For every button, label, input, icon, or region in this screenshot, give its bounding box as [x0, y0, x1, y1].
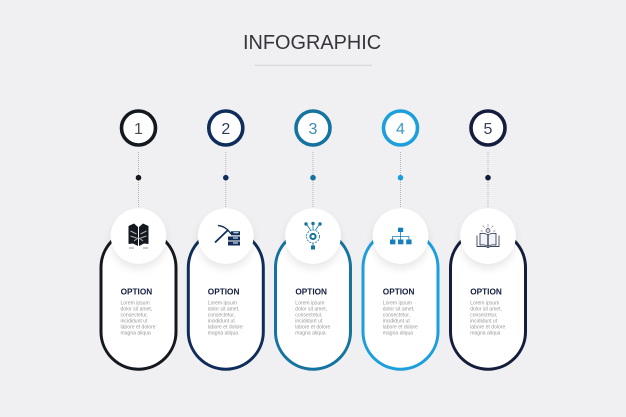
- text: option 5: OPTION: [470, 288, 502, 296]
- text: option 2: labore et dolore: [208, 324, 243, 330]
- number badge 4: [384, 111, 418, 145]
- icon: brain book: [128, 224, 148, 248]
- text: option 3: OPTION: [295, 288, 327, 296]
- text: option 5: incididunt ut: [470, 318, 498, 324]
- text: option 4: magna aliqua: [383, 330, 413, 336]
- text: option 2: consectetur,: [208, 312, 235, 318]
- number badge 4: 4: [396, 121, 405, 138]
- icon: pickaxe and bricks: [215, 226, 240, 246]
- panel: option 5: [450, 111, 526, 369]
- text: option 2: [208, 288, 243, 336]
- text: option 5: [470, 288, 505, 336]
- card 2: [188, 230, 263, 369]
- panel: option 2: [188, 111, 263, 369]
- text: option 4: incididunt ut: [383, 318, 410, 324]
- card 1: [101, 230, 176, 369]
- icon circle 1: [111, 208, 166, 264]
- text: option 1: magna aliqua: [120, 330, 151, 336]
- text: option 2: OPTION: [208, 288, 239, 296]
- panel: option 4: [363, 111, 438, 369]
- text: option 1: OPTION: [121, 288, 152, 296]
- text: option 3: Lorem ipsum: [295, 300, 324, 306]
- card 3: [276, 230, 350, 369]
- number badge 3: [296, 111, 330, 145]
- text: option 1: consectetur,: [120, 312, 148, 318]
- text: option 5: magna aliqua: [470, 330, 501, 336]
- text: option 4: [383, 288, 418, 336]
- connector 3: [310, 152, 316, 208]
- text: option 2: dolor sit amet,: [208, 306, 240, 312]
- text: option 3: [295, 288, 331, 336]
- text: option 5: dolor sit amet,: [470, 306, 502, 312]
- text: option 1: Lorem ipsum: [120, 300, 150, 306]
- text: option 2: Lorem ipsum: [208, 300, 237, 306]
- text: option 3: dolor sit amet,: [295, 306, 327, 312]
- text: option 1: incididunt ut: [120, 318, 148, 324]
- text: option 5: Lorem ipsum: [470, 300, 499, 306]
- connector 5: [485, 152, 491, 208]
- number badge 5: [471, 111, 505, 145]
- text: option 4: labore et dolore: [383, 324, 418, 330]
- text: option 1: dolor sit amet,: [120, 306, 152, 312]
- connector 1: [136, 152, 141, 208]
- icon circle 2: [198, 208, 254, 264]
- icon: org chart: [390, 228, 412, 244]
- text: option 1: labore et dolore: [120, 324, 156, 330]
- number badge 1: 1: [134, 121, 143, 138]
- text: option 4: dolor sit amet,: [383, 306, 415, 312]
- text: option 4: Lorem ipsum: [383, 300, 412, 306]
- icon circle 3: [285, 208, 341, 264]
- text: option 4: OPTION: [383, 288, 414, 296]
- number badge 3: 3: [309, 121, 318, 138]
- icon circle 5: [460, 208, 516, 264]
- text: option 2: incididunt ut: [208, 318, 235, 324]
- title: INFOGRAPHIC: [243, 32, 381, 54]
- panel: option 3: [276, 111, 350, 369]
- icon circle 4: [373, 208, 428, 264]
- number badge 5: 5: [484, 121, 493, 138]
- text: option 4: consectetur,: [383, 312, 410, 318]
- number badge 2: 2: [221, 121, 230, 138]
- icon: open book with light: [477, 224, 499, 248]
- number badge 2: [209, 111, 243, 145]
- text: option 3: magna aliqua: [295, 330, 326, 336]
- text: option 5: consectetur,: [470, 312, 497, 318]
- text: option 3: labore et dolore: [295, 324, 331, 330]
- panel: option 1: [101, 111, 176, 369]
- number badge 1: [122, 111, 156, 145]
- text: option 2: magna aliqua: [208, 330, 238, 336]
- text: option 3: incididunt ut: [295, 318, 323, 324]
- card 4: [363, 230, 438, 369]
- card 5: [450, 230, 526, 369]
- text: option 3: consectetur,: [295, 312, 323, 318]
- text: option 1: [120, 288, 156, 336]
- connector 4: [398, 152, 403, 208]
- text: option 5: labore et dolore: [470, 324, 505, 330]
- connector 2: [223, 152, 229, 208]
- icon: gear network: [304, 222, 322, 250]
